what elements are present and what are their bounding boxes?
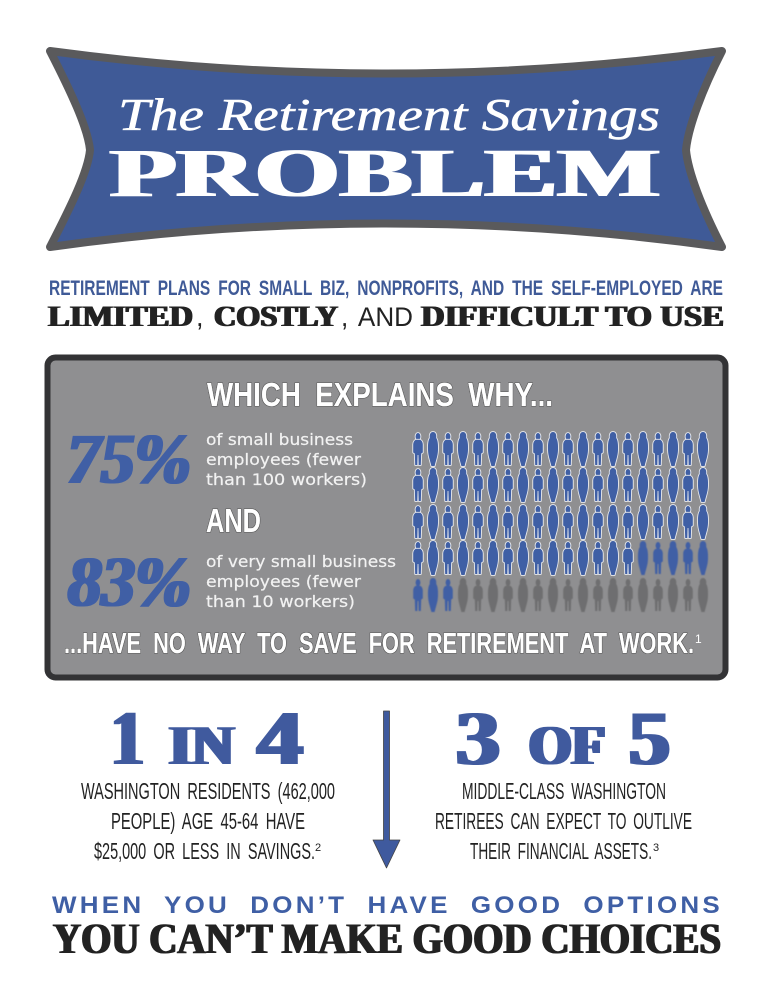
1 in 4 description: WASHINGTON RESIDENTS (462,000 xyxy=(81,778,335,804)
1 in 4 figure: IN xyxy=(169,715,234,777)
closing statement xyxy=(52,892,723,963)
75% description xyxy=(206,430,367,489)
83% description: than 10 workers) xyxy=(206,592,355,611)
stat: 1 in 4 xyxy=(81,695,335,864)
1 in 4 figure xyxy=(111,695,303,781)
3 of 5 description: 3 xyxy=(653,842,659,854)
subheading black line: , xyxy=(196,302,204,332)
title line: PROBLEM: PROBLEM xyxy=(110,135,660,211)
title banner xyxy=(50,51,722,247)
3 of 5 description: THEIR FINANCIAL ASSETS. xyxy=(470,838,652,864)
stat: 83%: 83% xyxy=(68,542,191,622)
banner shape xyxy=(50,51,722,247)
subheading black line xyxy=(48,300,724,333)
arrow: down xyxy=(373,711,400,868)
stat: 75%: 75% xyxy=(67,419,191,499)
stat: 3 of 5 xyxy=(435,695,692,864)
subheading black line: LIMITED xyxy=(48,300,193,333)
1 in 4 description: PEOPLE) AGE 45-64 HAVE xyxy=(111,808,305,834)
3 of 5 figure: 3 xyxy=(456,695,500,781)
title line: The Retirement Savings: The Retirement Savings xyxy=(118,90,660,140)
panel background xyxy=(48,358,726,678)
75% description: of small business xyxy=(206,430,353,449)
3 of 5 description xyxy=(435,778,692,864)
75% description: than 100 workers) xyxy=(206,470,367,489)
subheading black line: DIFFICULT TO USE xyxy=(421,300,724,333)
subheading xyxy=(48,277,724,333)
3 of 5 figure: OF xyxy=(529,715,605,777)
footnote 1: 1 xyxy=(695,632,702,646)
1 in 4 description: 2 xyxy=(315,842,321,854)
pictogram: people xyxy=(413,432,708,612)
75% description: employees (fewer xyxy=(206,450,361,469)
AND label: AND xyxy=(206,502,261,539)
1 in 4 figure: 1 xyxy=(111,695,144,781)
subheading black line: , AND xyxy=(341,302,413,332)
subheading black line: COSTLY xyxy=(214,300,338,333)
3 of 5 figure: 5 xyxy=(629,695,670,781)
closing black line: YOU CAN’T MAKE GOOD CHOICES xyxy=(53,916,721,963)
panel: which explains why xyxy=(48,358,726,678)
closing blue line: WHEN YOU DON’T HAVE GOOD OPTIONS xyxy=(52,892,723,919)
83% description: of very small business xyxy=(206,552,396,571)
1 in 4 description xyxy=(81,778,335,864)
83% description: employees (fewer xyxy=(206,572,361,591)
83% description xyxy=(206,552,396,611)
1 in 4 description: $25,000 OR LESS IN SAVINGS. xyxy=(94,838,315,864)
1 in 4 figure: 4 xyxy=(257,695,303,781)
panel heading: WHICH EXPLAINS WHY... xyxy=(207,376,553,413)
3 of 5 figure xyxy=(456,695,670,781)
